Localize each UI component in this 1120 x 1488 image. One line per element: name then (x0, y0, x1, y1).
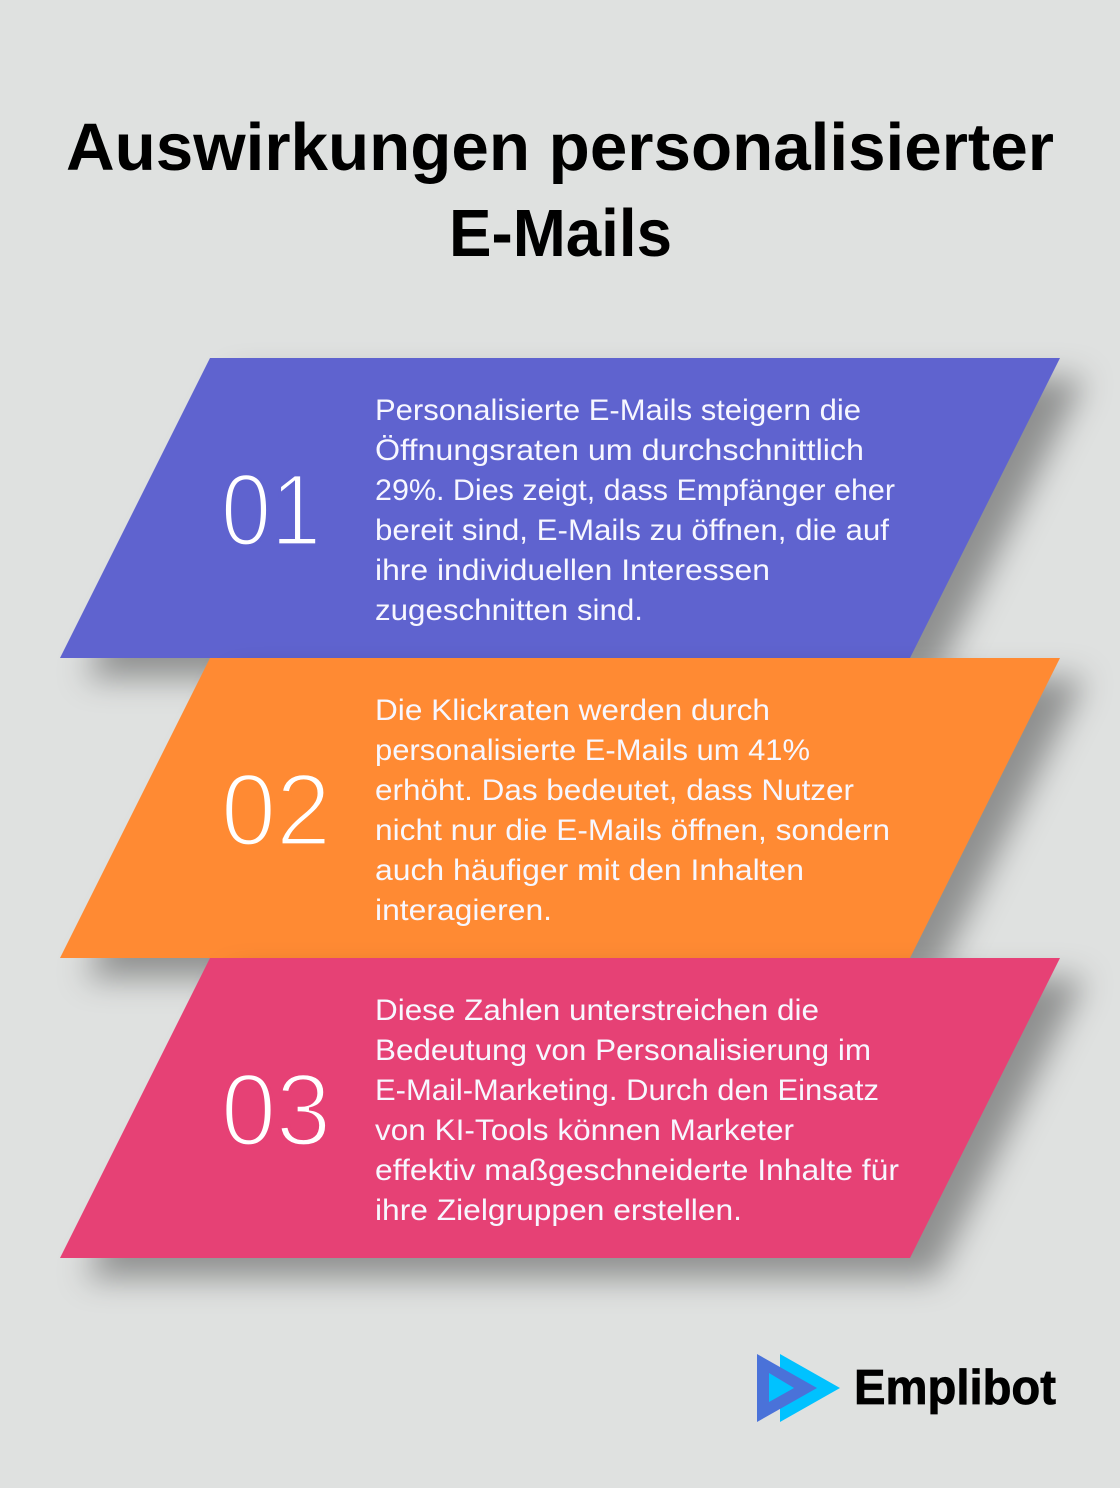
text: step 02 description: interagieren. (375, 894, 552, 927)
number 02: 02 (221, 753, 331, 867)
text: step 01 description: Personalisierte E-Mails steigern die (375, 394, 861, 427)
panel: step 03 (60, 958, 1085, 1278)
text: step 03 description: ihre Zielgruppen erstellen. (375, 1194, 742, 1227)
text: step 02 description: personalisierte E-Mails um 41% (375, 734, 810, 767)
text: step 02 description: nicht nur die E-Mails öffnen, sondern (375, 814, 890, 847)
text: step 01 description (375, 394, 895, 627)
text: step 03 description: Bedeutung von Personalisierung im (375, 1034, 871, 1067)
text: step 01 description: bereit sind, E-Mails zu öffnen, die auf (375, 514, 890, 547)
text: step 01 description: Öffnungsraten um durchschnittlich (375, 434, 864, 467)
text: step 03 description (375, 994, 899, 1227)
text: step 01 description: ihre individuellen Interessen (375, 554, 770, 587)
wordmark: Emplibot (854, 1361, 1056, 1415)
title (66, 110, 1054, 271)
text: step 02 description: auch häufiger mit den Inhalten (375, 854, 804, 887)
text: step 01 description: 29%. Dies zeigt, dass Empfänger eher (375, 474, 895, 507)
shape: pink parallelogram (60, 958, 1060, 1258)
text: step 03 description: E-Mail-Marketing. Durch den Einsatz (375, 1074, 879, 1107)
text: step 02 description: erhöht. Das bedeutet, dass Nutzer (375, 774, 854, 807)
text: step 03 description: Diese Zahlen unterstreichen die (375, 994, 819, 1027)
title: Auswirkungen personalisierter (66, 110, 1054, 185)
shape: blue parallelogram (60, 358, 1060, 658)
text: step 02 description: Die Klickraten werden durch (375, 694, 770, 727)
shape: orange parallelogram (60, 658, 1060, 958)
text: step 01 description: zugeschnitten sind. (375, 594, 643, 627)
panel: step 02 (60, 658, 1085, 978)
panel: step 01 (60, 358, 1085, 678)
logo: Emplibot (757, 1354, 1056, 1422)
text: step 02 description (375, 694, 890, 927)
text: step 03 description: von KI-Tools können Marketer (375, 1114, 794, 1147)
number 03: 03 (221, 1053, 331, 1167)
text: step 03 description: effektiv maßgeschneiderte Inhalte für (375, 1154, 899, 1187)
title: E-Mails (449, 196, 672, 271)
icon: play triangles (757, 1354, 840, 1422)
number 01: 01 (221, 453, 321, 567)
